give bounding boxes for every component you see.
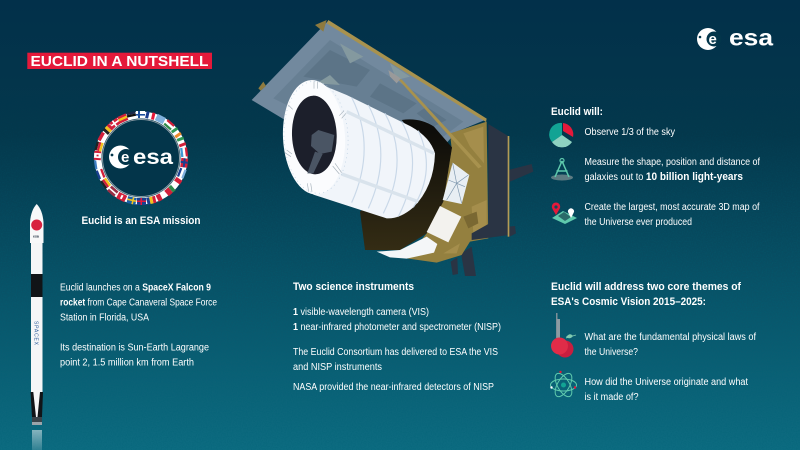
- text: question two: is it made of?: [584, 392, 639, 403]
- legs and side arms: [451, 164, 533, 276]
- telescope tube: [280, 78, 435, 218]
- logo: esa top right: e: [708, 31, 717, 48]
- logo: esa top right: [697, 24, 773, 50]
- dark baffle interior: [360, 119, 452, 250]
- text: observe: Observe 1/3 of the sky: [584, 127, 675, 138]
- text: question one: What are the fundamental physical laws of: [584, 332, 756, 343]
- bottom white panel: [377, 237, 437, 259]
- text block: launch: rocket from Cape Canaveral Space Force: [60, 298, 217, 308]
- strut tip: [388, 70, 401, 83]
- text: measure: galaxies out to 10 billion light-years: [584, 171, 743, 183]
- spacecraft illustration: [252, 20, 533, 276]
- navy side panel: [472, 124, 509, 240]
- flags ring with esa logo: esa: [133, 146, 173, 169]
- rocket: SPACEX: [32, 321, 38, 346]
- text block: launch: Station in Florida, USA: [60, 312, 149, 324]
- icon: map with pins: [552, 202, 577, 224]
- secondary mirror: [307, 130, 334, 173]
- heading: Euclid is an ESA mission: Euclid is an ESA mission: [82, 215, 201, 227]
- text: measure: [584, 157, 760, 183]
- text block: launch: Its destination is Sun-Earth Lagrange: [60, 342, 209, 354]
- heading: core themes: ESA's Cosmic Vision 2015–2025:: [551, 296, 706, 308]
- icon: compass: [551, 158, 573, 180]
- gold service module: [407, 122, 488, 263]
- white panel: [427, 206, 461, 242]
- text: question one: [584, 332, 756, 358]
- text block: two science instruments: Two science instruments: [293, 281, 414, 293]
- text: create: the Universe ever produced: [584, 217, 692, 228]
- text: measure: Measure the shape, position and distance of: [584, 157, 760, 168]
- radiator window: [443, 163, 469, 204]
- icon: pie chart: [549, 123, 573, 147]
- title: EUCLID IN A NUTSHELL: [30, 53, 208, 70]
- text block: two science instruments: NASA provided the near-infrared detectors of NISP: [293, 382, 494, 393]
- rocket: esa: [33, 234, 39, 238]
- telescope aperture: [291, 95, 338, 175]
- text block: two science instruments: 1 near-infrared photometer and spectrometer (NISP): [293, 322, 501, 333]
- logo: esa top right: esa: [729, 24, 773, 50]
- heading: Euclid will: Euclid will:: [551, 106, 603, 118]
- text: create: Create the largest, most accurate 3D map of: [584, 202, 760, 213]
- text: question one: the Universe?: [584, 347, 638, 358]
- sunshield: [252, 20, 487, 147]
- text: question two: [584, 377, 748, 403]
- text block: launch: [60, 282, 217, 368]
- background: [0, 144, 800, 450]
- gold panel edge: [508, 136, 509, 237]
- text block: launch: point 2, 1.5 million km from Earth: [60, 358, 194, 368]
- heading: core themes: [551, 281, 741, 308]
- text block: two science instruments: 1 visible-wavelength camera (VIS): [293, 307, 429, 318]
- text block: two science instruments: The Euclid Consortium has delivered to ESA the VIS: [293, 347, 498, 358]
- flags ring with esa logo: [94, 111, 188, 205]
- text block: two science instruments: [293, 281, 501, 393]
- strut: [398, 79, 482, 168]
- text block: launch: Euclid launches on a SpaceX Falcon 9: [60, 282, 211, 294]
- icon: atom: [550, 371, 576, 399]
- text: create: [584, 202, 760, 228]
- text: question two: How did the Universe originate and what: [584, 377, 748, 388]
- rocket: [30, 204, 44, 450]
- icon: apple and tower: [551, 313, 576, 358]
- text block: two science instruments: and NISP instruments: [293, 362, 382, 373]
- heading: core themes: Euclid will address two core themes of: [551, 281, 741, 293]
- flags ring with esa logo: e: [121, 149, 129, 166]
